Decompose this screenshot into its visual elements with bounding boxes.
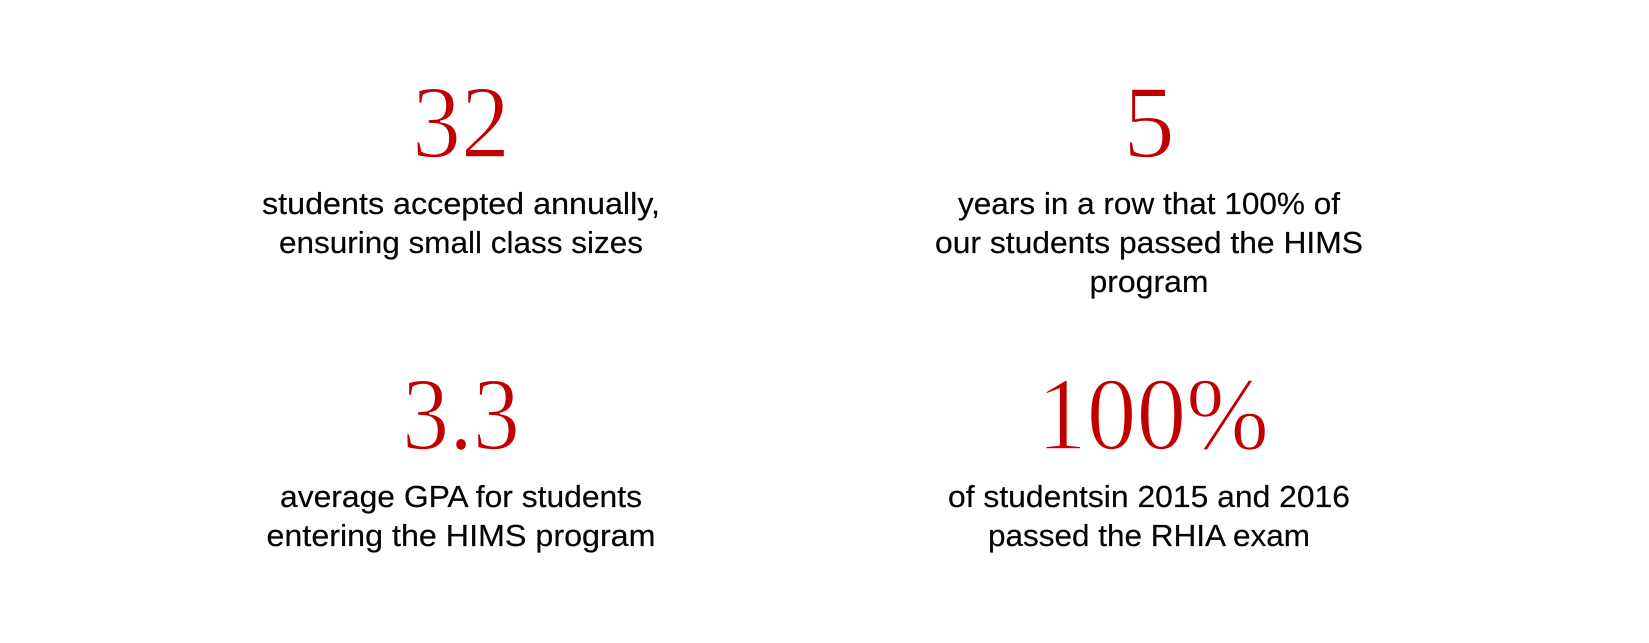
number: 32: 32 [412, 65, 510, 180]
number: 3.3: 3.3 [402, 357, 520, 472]
stat: 100% RHIA [948, 357, 1350, 553]
description: of students: passed the RHIA exam [988, 518, 1310, 553]
description: students accepted [262, 186, 660, 260]
description: years in a row: program [1090, 264, 1208, 299]
stat: 32 students [262, 65, 660, 260]
description: average GPA: entering the HIMS program [266, 518, 656, 553]
description: average GPA: average GPA for students [280, 479, 642, 514]
description: students accepted: ensuring small class sizes [279, 225, 643, 260]
description: years in a row: years in a row that 100% of [958, 186, 1340, 221]
stat: 3.3 GPA [266, 357, 656, 553]
description: years in a row [935, 186, 1363, 299]
number: 100%: 100% [1037, 357, 1269, 472]
description: students accepted: students accepted annually, [262, 186, 660, 221]
description: average GPA [266, 479, 656, 553]
number: 5: 5 [1123, 65, 1175, 180]
stat: 5 years [935, 65, 1363, 299]
description: years in a row: our students passed the HIMS [935, 225, 1363, 260]
description: of students: of studentsin 2015 and 2016 [948, 479, 1350, 514]
description: of students [948, 479, 1350, 553]
